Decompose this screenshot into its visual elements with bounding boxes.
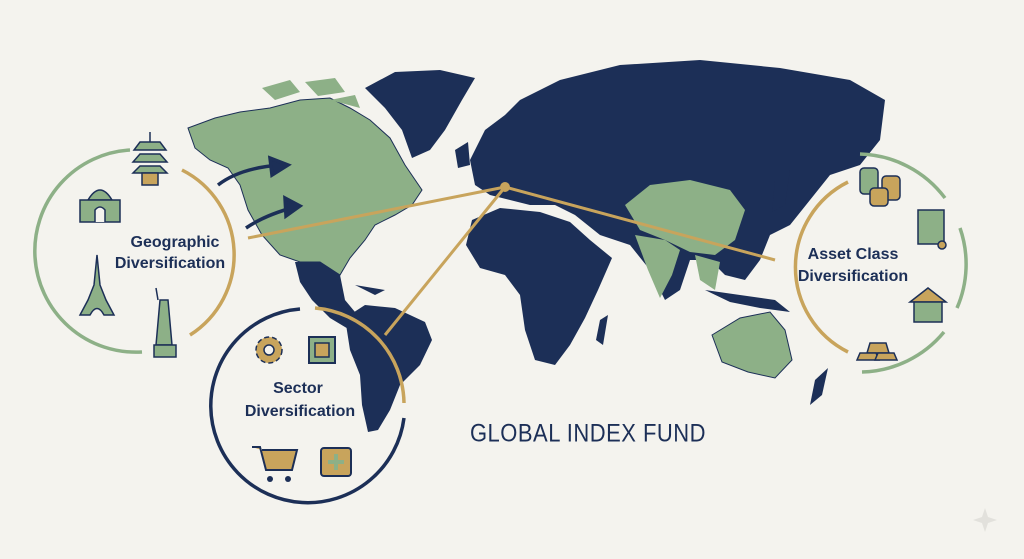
- panel: asset class diversification: Asset Class: [808, 246, 898, 263]
- australia: [712, 312, 792, 378]
- new zealand: [810, 368, 828, 405]
- icon: cart: [252, 447, 297, 482]
- icon: coins: [860, 168, 900, 206]
- panel: sector diversification: Diversification: [245, 403, 355, 420]
- world map: [188, 60, 885, 432]
- icon: taj mahal: [80, 190, 120, 222]
- arrows: [218, 158, 300, 228]
- india: [635, 235, 680, 298]
- panel: sector diversification: Sector: [273, 380, 323, 397]
- japan: [772, 170, 790, 212]
- icon: statue of liberty: [154, 288, 176, 357]
- icon: medical kit: [321, 448, 351, 476]
- connector lines: [248, 187, 775, 335]
- panel: asset class diversification: Diversification: [798, 268, 908, 285]
- panel: asset class diversification: [795, 154, 966, 372]
- africa: [466, 208, 612, 365]
- hub dot: [500, 182, 510, 192]
- icon: gold bars: [857, 343, 897, 360]
- icon: eiffel tower: [80, 255, 114, 315]
- madagascar: [596, 315, 608, 345]
- icon: gear: [256, 337, 282, 363]
- icon: bond certificate: [918, 210, 946, 249]
- caribbean: [355, 285, 385, 295]
- title: GLOBAL INDEX FUND: [470, 420, 706, 448]
- eurasia: [470, 60, 885, 300]
- british isles: [455, 142, 470, 168]
- southeast asia: [695, 255, 720, 290]
- panel: geographic diversification: Diversification: [115, 255, 225, 272]
- panel: geographic diversification: Geographic: [131, 234, 220, 251]
- south america: [345, 305, 432, 432]
- icon: house: [910, 288, 946, 322]
- sparkle: [973, 508, 997, 532]
- central america: [295, 262, 360, 330]
- icon: pagoda: [133, 132, 167, 185]
- indonesia: [705, 290, 790, 312]
- panel: geographic diversification: [35, 132, 234, 357]
- arctic islands: [262, 78, 360, 108]
- panel: sector diversification: [211, 308, 404, 503]
- greenland: [365, 70, 475, 158]
- china: [625, 180, 745, 255]
- north america: [188, 98, 422, 275]
- icon: chip: [309, 337, 335, 363]
